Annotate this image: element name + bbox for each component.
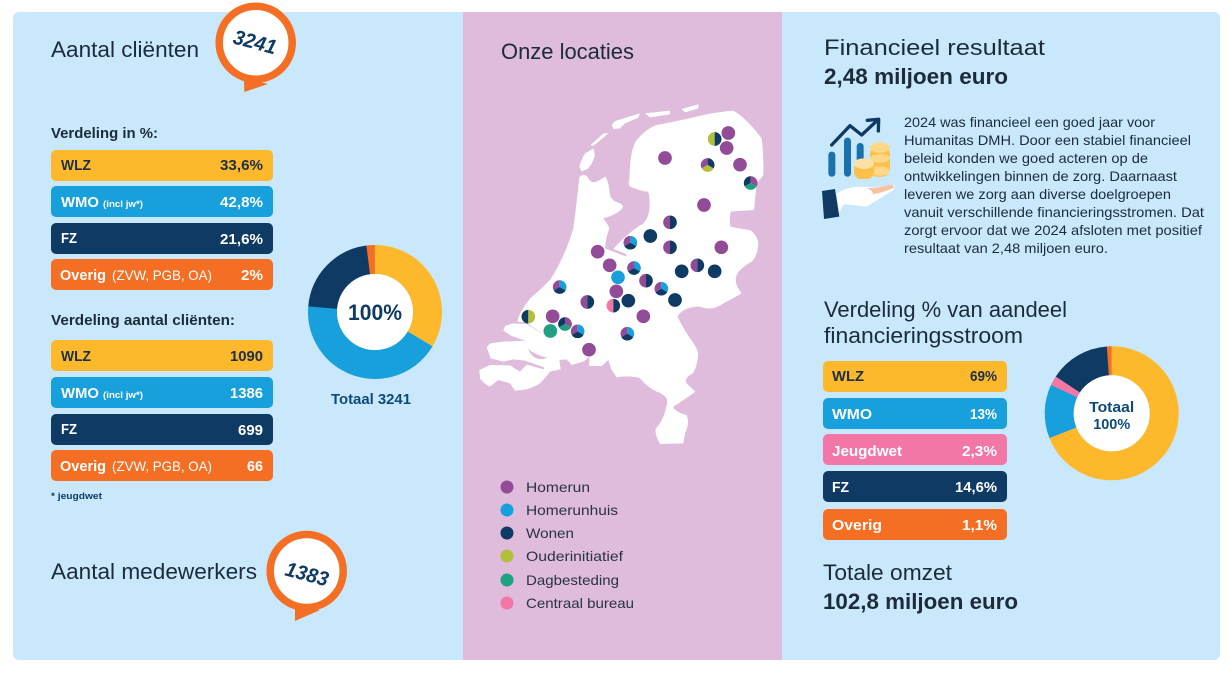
text block: financial summary: ontwikkelingen binnen de zorg. Daarnaast xyxy=(904,169,1177,184)
bar: WLZ 1090: WLZ xyxy=(61,349,91,365)
map shape xyxy=(479,104,763,444)
bar: WLZ 1090: 1090 xyxy=(230,349,263,365)
bar: WMO 13%: WMO xyxy=(832,407,872,423)
heading: totale omzet: Totale omzet xyxy=(823,560,952,585)
bar: WLZ 33,6%: 33,6% xyxy=(220,158,263,174)
donut chart: clients xyxy=(303,240,447,384)
text block: financial summary xyxy=(904,115,1204,256)
legend item: ouderinitiatief: Ouderinitiatief xyxy=(526,548,623,564)
subheading: verdeling aantal clienten: Verdeling aantal cliënten: xyxy=(51,313,235,329)
bar: WMO 13%: 13% xyxy=(970,407,997,423)
label: totaal 3241: Totaal 3241 xyxy=(331,392,411,408)
footnote: jeugdwet: * jeugdwet xyxy=(51,491,102,501)
map: Netherlands with location markers xyxy=(479,104,763,444)
panel: locations xyxy=(463,12,782,660)
bar: FZ 699: FZ xyxy=(61,422,77,438)
bar: Jeugdwet 2,3%: 2,3% xyxy=(962,444,997,460)
text block: financial summary: leveren we zorg aan diverse doelgroepen xyxy=(904,187,1171,202)
bar: WMO 1386 xyxy=(51,377,273,408)
bar: WMO 1386: WMO xyxy=(61,386,99,402)
heading: verdeling financieringsstroom xyxy=(824,297,1067,348)
bar: Overig 2%: 2% xyxy=(241,268,263,284)
icon: money growth on hand xyxy=(822,119,895,219)
callout: 1383 employees xyxy=(270,534,343,621)
donut chart: funding: 100% xyxy=(1093,417,1130,433)
markers xyxy=(522,126,758,356)
bar: FZ 21,6%: FZ xyxy=(61,231,77,247)
bar: WLZ 33,6% xyxy=(51,150,273,181)
callout: 3241 clients xyxy=(219,6,292,92)
bar: Overig 2% xyxy=(51,259,273,290)
bar: WLZ 1090 xyxy=(51,340,273,371)
bar: Overig 1,1%: 1,1% xyxy=(962,518,997,534)
legend xyxy=(500,479,634,611)
bar: Overig 1,1%: Overig xyxy=(832,518,882,534)
bar: WLZ 69%: WLZ xyxy=(832,369,864,385)
bar: Overig 66: (ZVW, PGB, OA) xyxy=(112,458,212,474)
text block: financial summary: Humanitas DMH. Door een stabiel financieel xyxy=(904,133,1191,148)
bar: Overig 2%: Overig xyxy=(60,268,106,284)
bar: FZ 14,6%: FZ xyxy=(832,480,849,496)
bar: FZ 21,6% xyxy=(51,223,273,254)
text block: financial summary: resultaat van 2,48 miljoen euro. xyxy=(904,241,1108,256)
text block: financial summary: zorgt ervoor dat we 2024 afsloten met positief xyxy=(904,223,1202,238)
bar list: percentages xyxy=(51,150,273,290)
legend item: dagbesteding: Dagbesteding xyxy=(526,572,619,588)
bar list: counts xyxy=(51,340,273,481)
bar: WLZ 69% xyxy=(823,361,1007,392)
bar: WLZ 33,6%: WLZ xyxy=(61,158,91,174)
callout: 1383 employees: 1383 xyxy=(283,558,332,591)
heading: aantal clienten: Aantal cliënten xyxy=(51,37,199,62)
bar: FZ 699 xyxy=(51,414,273,445)
text block: financial summary: vanuit verschillende financieringsstromen. Dat xyxy=(904,205,1204,220)
callout: 3241 clients: 3241 xyxy=(231,26,279,59)
bar: Overig 66: 66 xyxy=(247,459,263,475)
bar list: funding streams xyxy=(823,361,1007,540)
heading: verdeling financieringsstroom: Verdeling % van aandeel xyxy=(824,297,1067,322)
legend item: homerun: Homerun xyxy=(526,479,590,495)
bar: FZ 14,6%: 14,6% xyxy=(955,480,997,496)
panel: clients xyxy=(51,6,447,621)
bar: WMO 1386: (incl jw*) xyxy=(103,390,143,400)
bar: WMO 1386: 1386 xyxy=(230,386,263,402)
figure: 102,8 miljoen euro: 102,8 miljoen euro xyxy=(823,589,1018,614)
donut chart: clients: 100% xyxy=(348,300,402,325)
bar: Overig 2%: (ZVW, PGB, OA) xyxy=(112,267,212,283)
bar: WLZ 69%: 69% xyxy=(970,369,997,385)
legend item: homerunhuis: Homerunhuis xyxy=(526,502,618,518)
bar: Overig 66: Overig xyxy=(60,459,106,475)
legend item: wonen: Wonen xyxy=(526,525,574,541)
donut chart: funding: Totaal xyxy=(1089,400,1134,416)
bar: FZ 14,6% xyxy=(823,471,1007,502)
heading: aantal medewerkers: Aantal medewerkers xyxy=(51,559,257,584)
bar: Overig 66 xyxy=(51,450,273,481)
text block: financial summary: 2024 was financieel een goed jaar voor xyxy=(904,115,1155,130)
heading: onze locaties: Onze locaties xyxy=(501,39,634,64)
bar: WMO 42,8%: WMO xyxy=(61,195,99,211)
bar: Jeugdwet 2,3% xyxy=(823,434,1007,465)
bar: Overig 1,1% xyxy=(823,509,1007,540)
bar: WMO 13% xyxy=(823,398,1007,429)
bar: FZ 21,6%: 21,6% xyxy=(220,232,263,248)
bar: WMO 42,8%: (incl jw*) xyxy=(103,199,143,209)
legend item: centraal bureau: Centraal bureau xyxy=(526,595,634,611)
figure: 2,48 miljoen euro: 2,48 miljoen euro xyxy=(824,64,1008,89)
heading: verdeling financieringsstroom: financieringsstroom xyxy=(824,323,1023,348)
heading: financieel resultaat: Financieel resultaat xyxy=(824,35,1045,60)
bar: FZ 699: 699 xyxy=(238,423,263,439)
bar: WMO 42,8%: 42,8% xyxy=(220,195,263,211)
subheading: verdeling in procent: Verdeling in %: xyxy=(51,126,158,142)
bar: Jeugdwet 2,3%: Jeugdwet xyxy=(832,444,902,460)
bar: WMO 42,8% xyxy=(51,186,273,217)
panel: finance xyxy=(822,35,1204,614)
text block: financial summary: beleid konden we goed acteren op de xyxy=(904,151,1148,166)
donut chart: funding xyxy=(1039,341,1184,486)
